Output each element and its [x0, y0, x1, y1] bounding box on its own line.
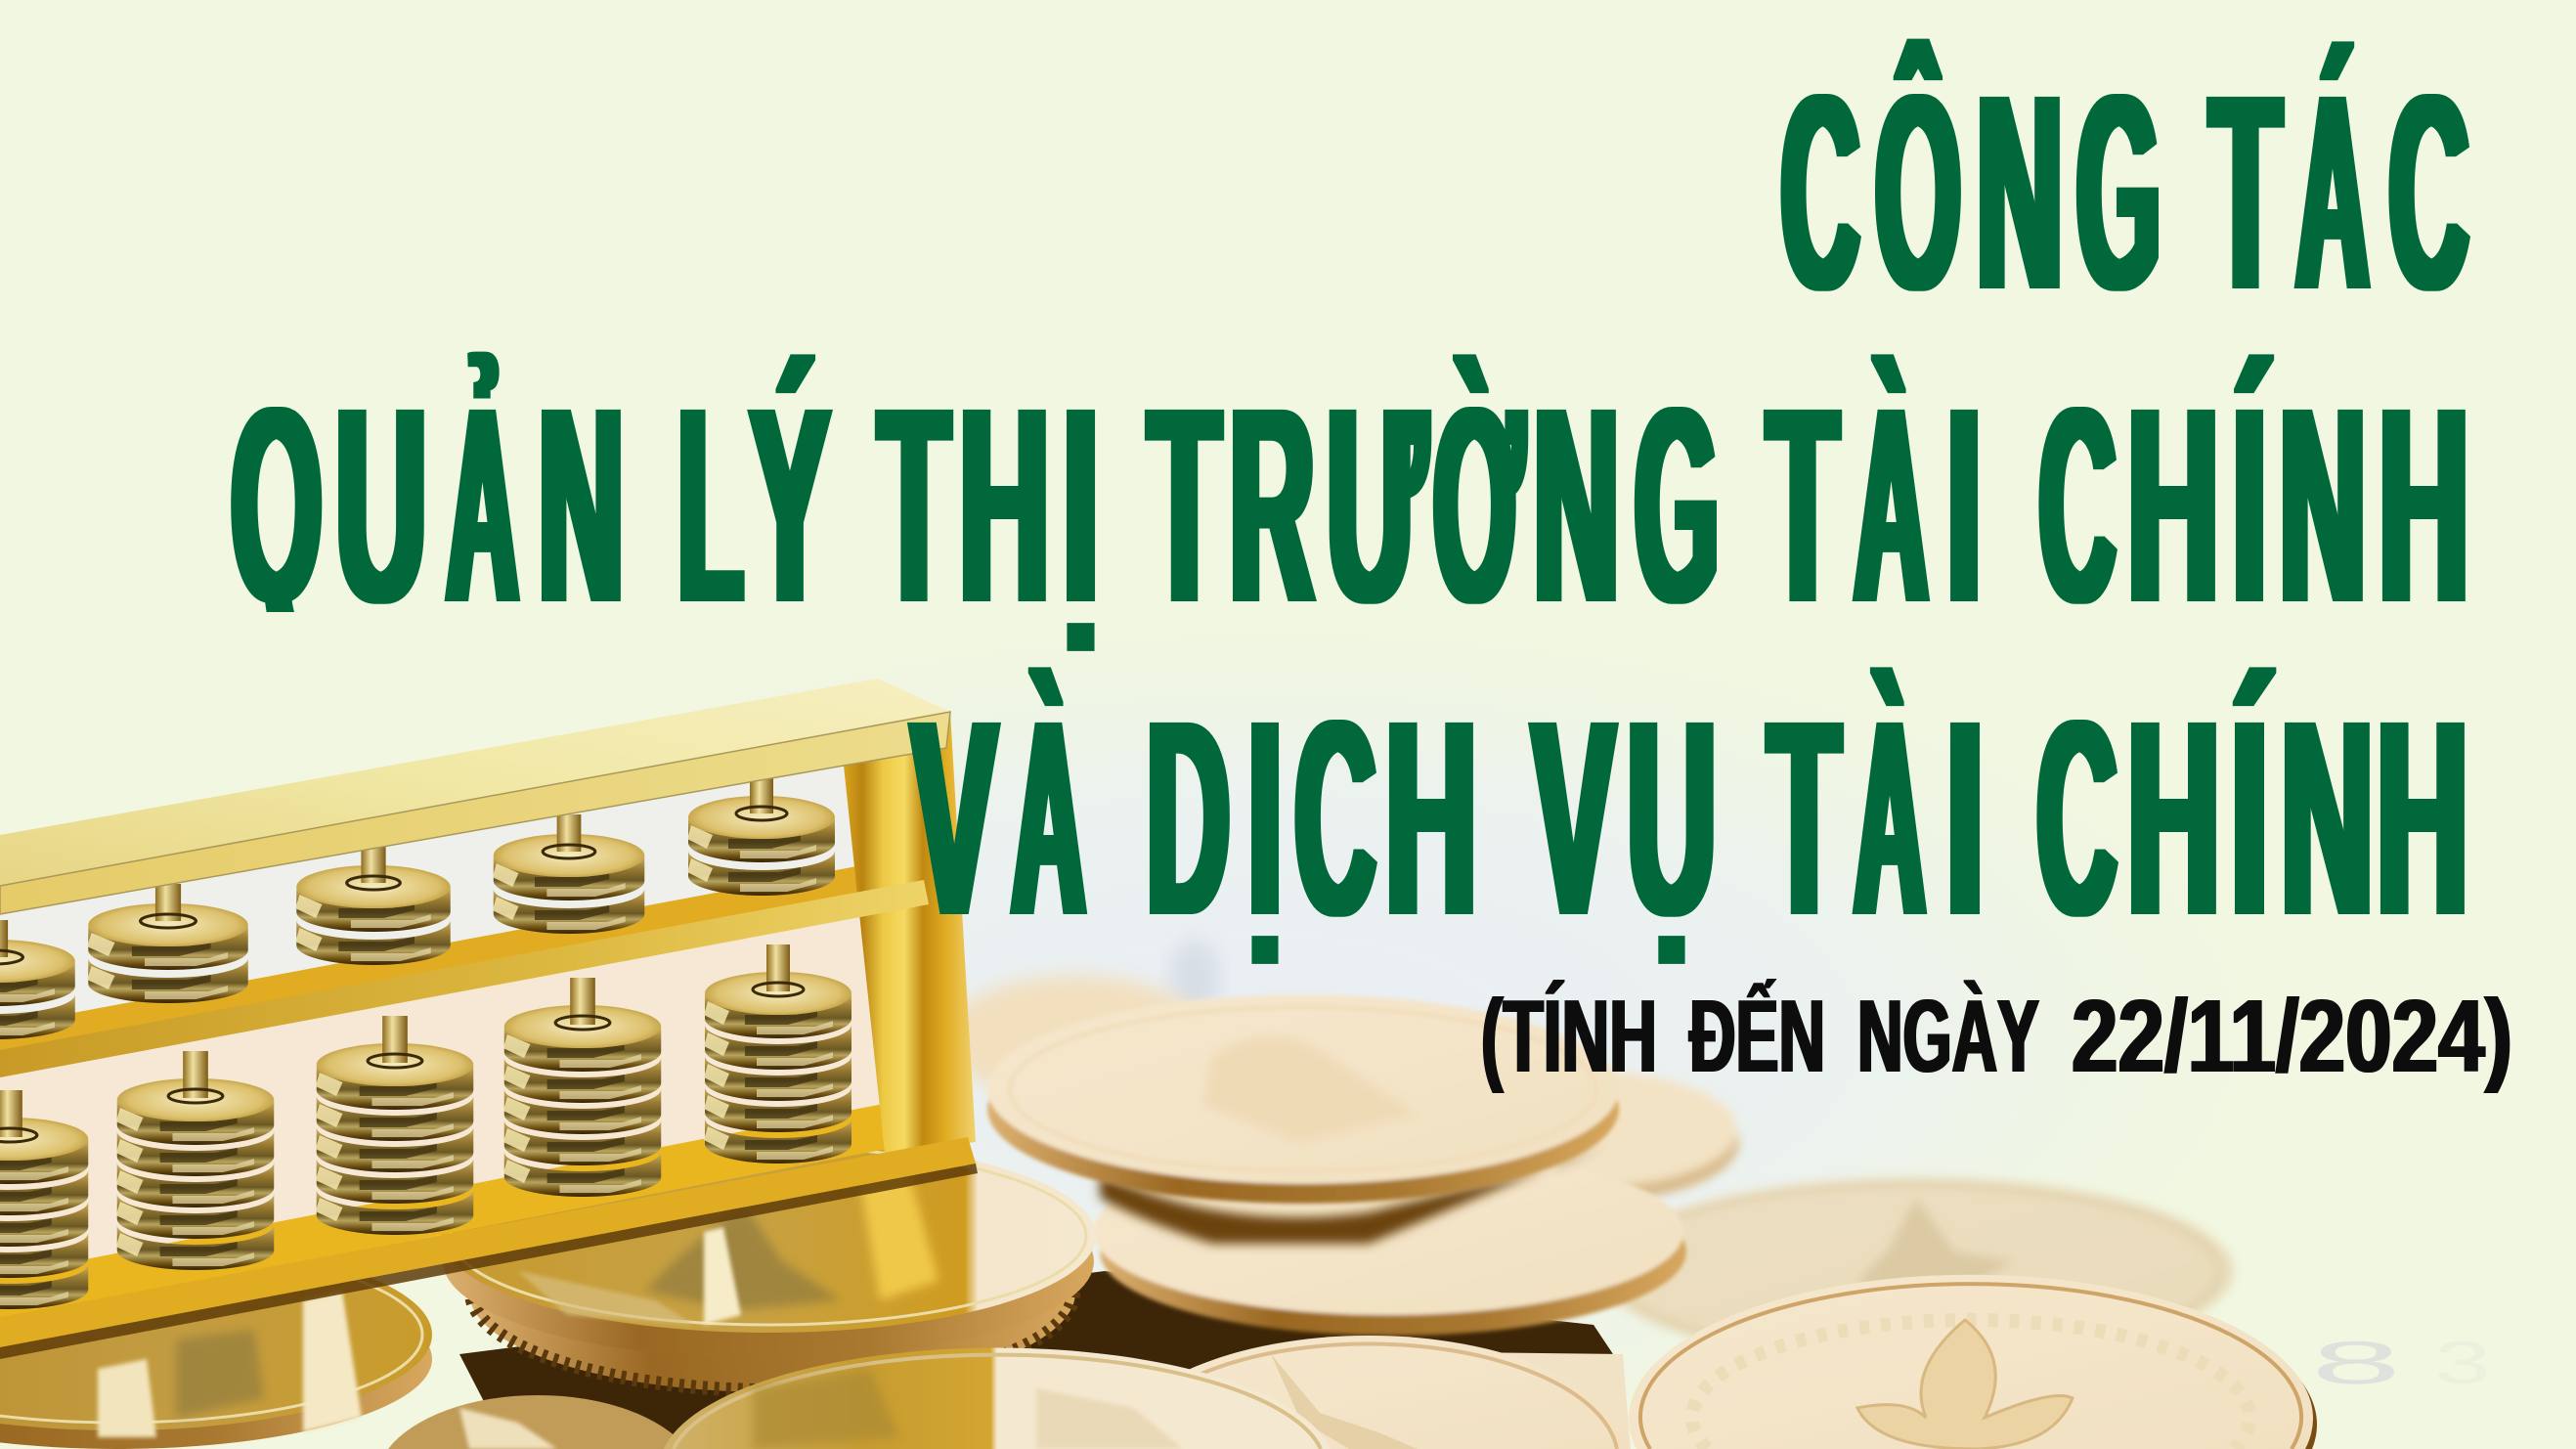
text: H: [2377, 663, 2468, 974]
title line 2: T: [1768, 350, 1838, 661]
title line 2: L: [678, 350, 743, 661]
subtitle date: NGÀY: [1857, 979, 2039, 1094]
faint numerals behind the coins: 8: [2311, 1330, 2401, 1397]
coin: under centre: [1093, 1149, 1686, 1336]
coin: bottom centre right: [1108, 1336, 1631, 1449]
subtitle date: ĐẾN: [1689, 979, 1825, 1094]
title line 3: À: [1855, 663, 1925, 974]
title line 1: Á: [2296, 37, 2369, 348]
title line 2: [231, 349, 2468, 661]
title line 2: N: [539, 350, 624, 661]
abacus lower beads: [0, 944, 851, 1309]
coin: bottom small: [388, 1395, 687, 1449]
coin: back left: [943, 976, 1207, 1101]
title line 2: C: [2039, 350, 2116, 661]
coin: right back: [1598, 1177, 2234, 1365]
shadow base under the coins: [459, 1271, 1613, 1449]
title line 3: [911, 663, 2468, 974]
title line 3: V: [1532, 663, 1616, 974]
title line 3: N: [2281, 663, 2374, 974]
title line 2: Ư: [1327, 350, 1428, 661]
title line 3: C: [1295, 663, 1375, 974]
title line 1: Ô: [1875, 36, 1961, 348]
title line 3: À: [1012, 663, 1085, 974]
coin: bottom centre: [664, 1348, 1331, 1449]
title line 2: N: [2280, 350, 2366, 661]
abacus upper window: [0, 763, 929, 1056]
title line 2: U: [335, 350, 427, 661]
title line 2: Ý: [750, 350, 830, 661]
abacus top face: [0, 679, 950, 886]
title line 2: H: [959, 350, 1049, 661]
coin: left: [0, 1239, 432, 1449]
title: [231, 36, 2468, 974]
gold tray above bottom rail: [0, 1093, 963, 1320]
faint numerals behind the coins: 3: [2434, 1330, 2491, 1397]
title line 2: T: [878, 350, 950, 661]
title line 3: H: [2127, 663, 2220, 974]
coin: second stacked under abacus coin: [469, 1193, 1075, 1392]
title line 2: Ờ: [1433, 350, 1524, 661]
abacus right post: [844, 712, 976, 1154]
title line 3: Ụ: [1628, 663, 1716, 974]
title line 3: H: [1385, 663, 1477, 974]
title line 1: N: [1977, 37, 2063, 348]
title line 2: Ả: [447, 349, 518, 661]
coin: reflecting abacus: [441, 1139, 1096, 1359]
title line 2: I: [1947, 350, 1981, 661]
coins pile: [0, 976, 2317, 1449]
title line 3: V: [911, 663, 998, 974]
abacus: [0, 679, 978, 1359]
subtitle date: (TÍNH: [1481, 979, 1657, 1094]
abacus bottom rail: [0, 1137, 976, 1347]
title line 2: À: [1855, 350, 1928, 661]
text: H: [2379, 350, 2468, 661]
title line 2: H: [2127, 350, 2219, 661]
title line 1: T: [2209, 37, 2282, 348]
title line 1: C: [1781, 37, 1859, 348]
title line 1: [1781, 36, 2468, 348]
title line 3: Í: [2231, 663, 2273, 974]
gold tray above middle rail: [0, 856, 921, 1054]
abacus middle rail: [0, 880, 929, 1077]
title line 2: Ị: [1063, 350, 1099, 661]
abacus top front rail: [0, 712, 950, 914]
title line 2: Í: [2233, 350, 2271, 661]
title line 2: N: [1534, 350, 1619, 661]
abacus lower window: [0, 904, 890, 1300]
title line 1: G: [2076, 37, 2161, 348]
title line 2: Q: [231, 350, 322, 661]
subtitle date: [1481, 979, 2512, 1094]
title line 2: G: [1635, 350, 1719, 661]
coin: behind centre right: [1430, 1071, 1739, 1203]
title line 3: D: [1147, 663, 1230, 974]
title line 3: C: [2037, 663, 2117, 974]
faint numerals behind the coins: [2311, 1330, 2491, 1397]
title line 2: T: [1148, 350, 1220, 661]
abacus upper beads: [0, 776, 835, 1039]
title line 3: I: [1946, 663, 1984, 974]
coin: centre top: [987, 994, 1619, 1244]
title line 3: T: [1768, 663, 1840, 974]
title line 3: Ị: [1248, 663, 1282, 974]
title line 2: R: [1230, 350, 1314, 661]
coin: front right with lotus: [1629, 1275, 2317, 1449]
